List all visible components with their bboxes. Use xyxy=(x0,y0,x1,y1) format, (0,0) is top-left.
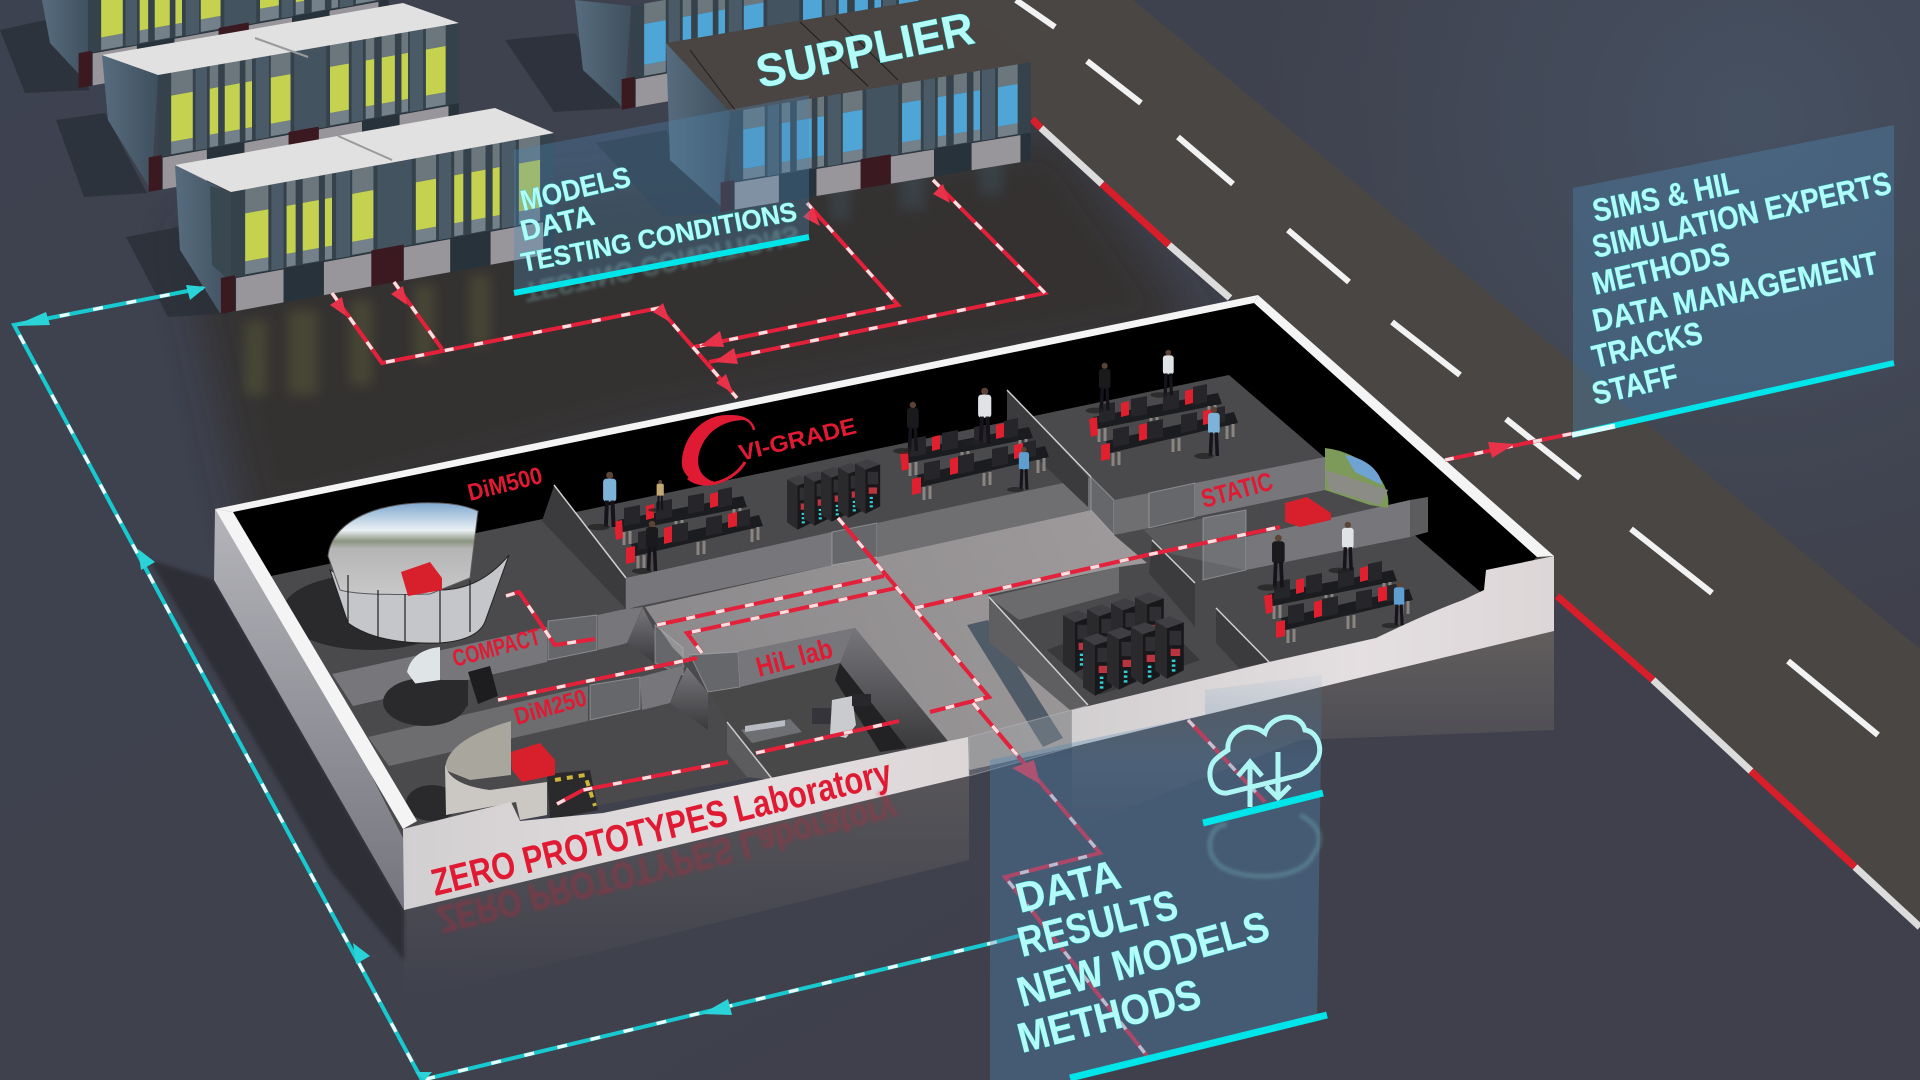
ground reflections xyxy=(150,135,1554,1000)
panel: supplier inputs xyxy=(514,95,809,307)
compact simulator xyxy=(383,647,498,726)
HiL robot xyxy=(812,694,871,738)
DiM250 dividing wall xyxy=(368,665,708,766)
outputs text lines: RESULTS xyxy=(1013,881,1182,966)
building: supplier front xyxy=(596,0,1031,217)
label: COMPACT: COMPACT xyxy=(450,623,544,673)
resources text lines: METHODS xyxy=(1588,235,1733,302)
resources text lines: DATA MANAGEMENT xyxy=(1589,245,1882,339)
DiM500 simulator xyxy=(282,503,509,650)
icon: cloud up and down xyxy=(1210,717,1320,807)
server racks front row xyxy=(1083,616,1184,696)
panel text lines: DATA xyxy=(517,200,598,248)
road xyxy=(901,0,1920,927)
laboratory building xyxy=(214,295,1554,940)
static simulator screen and cab xyxy=(1285,448,1388,527)
resources text lines: STAFF xyxy=(1588,357,1681,412)
logo: VI-GRADE: VI-GRADE xyxy=(736,413,859,466)
HiL bench xyxy=(741,719,802,743)
outputs text lines: DATA xyxy=(1011,850,1125,922)
building: yellow rear xyxy=(0,0,389,93)
resources text lines: TRACKS xyxy=(1588,315,1706,375)
panel: laboratory outputs xyxy=(990,675,1327,1080)
reflection of testing conditions: TESTING CONDITIONS xyxy=(522,220,802,307)
corridor xyxy=(645,510,1147,770)
HiL lab room xyxy=(690,628,947,780)
DiM250 simulator xyxy=(406,721,598,821)
room one walls xyxy=(542,390,1091,610)
lab floor xyxy=(271,375,1484,840)
panel text lines: MODELS xyxy=(517,161,634,218)
red data flow lines xyxy=(330,180,1575,1057)
simulator desks xyxy=(614,384,1413,643)
building row: supplier blue rear xyxy=(505,0,932,112)
red arrowheads xyxy=(330,184,1515,784)
road kerb xyxy=(1032,119,1920,927)
static bay walls xyxy=(1091,457,1428,668)
room one server racks xyxy=(787,459,880,530)
lab front wall right section xyxy=(1072,556,1554,747)
lab front wall left section xyxy=(403,737,969,910)
outputs text lines: METHODS xyxy=(1013,970,1205,1062)
label: STATIC: STATIC xyxy=(1198,466,1276,514)
building: yellow front xyxy=(126,108,554,317)
cyan arrowheads xyxy=(14,285,732,1080)
entrance glass xyxy=(969,710,1072,776)
lab black interior xyxy=(233,303,1537,821)
label: ZERO PROTOTYPES Laboratory: ZERO PROTOTYPES Laboratory xyxy=(427,752,896,905)
DiM500 dividing wall xyxy=(332,607,683,706)
DiM500 cab xyxy=(401,562,442,596)
outputs text lines xyxy=(1011,850,1274,1062)
corridor shadow xyxy=(967,620,1063,747)
staff figures xyxy=(588,350,1404,628)
panel: vi-grade resources xyxy=(1572,125,1894,437)
supplier label: SUPPLIER xyxy=(751,2,978,98)
server room xyxy=(989,567,1226,710)
logo: VI-GRADE xyxy=(682,413,859,484)
outputs text lines: NEW MODELS xyxy=(1012,902,1274,1016)
label: HiL lab: HiL lab xyxy=(753,633,836,683)
lab outer left wall xyxy=(214,509,404,910)
lab rim xyxy=(215,295,1554,829)
reflection: ZERO PROTOTYPES Laboratory: ZERO PROTOTYPES Laboratory xyxy=(433,787,901,940)
cloud reflection xyxy=(1210,815,1319,876)
resources text lines: SIMS & HIL xyxy=(1589,164,1741,229)
label: DiM250: DiM250 xyxy=(511,684,590,731)
DiM250 cab xyxy=(511,743,555,782)
cyan return flow line xyxy=(14,285,1022,1080)
server racks back row xyxy=(1063,592,1164,673)
resources text lines xyxy=(1588,164,1894,412)
building: yellow middle xyxy=(56,3,459,197)
label: DiM500: DiM500 xyxy=(465,462,545,507)
panel text lines: TESTING CONDITIONS xyxy=(519,196,799,278)
road centre dashes xyxy=(1016,0,1878,735)
panel text lines xyxy=(517,161,799,278)
